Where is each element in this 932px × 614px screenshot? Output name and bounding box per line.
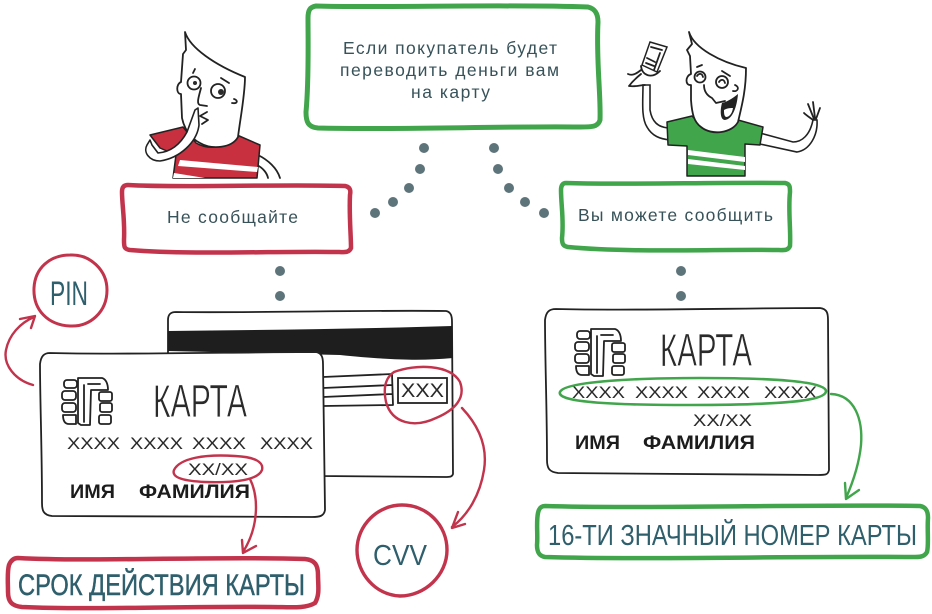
box: may share	[561, 183, 790, 250]
arrow: card to PIN	[6, 316, 35, 385]
card number: XXXX	[764, 383, 817, 402]
top box text: на карту	[411, 82, 490, 102]
top box: condition	[306, 6, 600, 129]
card front: ФАМИЛИЯ	[139, 482, 250, 503]
card front	[40, 352, 325, 517]
character: thinking man in red shirt	[146, 32, 280, 178]
top box text	[340, 38, 559, 102]
label box: expiry date: СРОК ДЕЙСТВИЯ КАРТЫ	[18, 568, 305, 602]
card number: XXXX	[635, 383, 688, 402]
card front: XX/XX	[188, 460, 248, 479]
card number: XXXX	[572, 383, 625, 402]
dotted connector: to left cards	[275, 266, 285, 301]
card right: ФАМИЛИЯ	[643, 433, 755, 454]
card number: XXXX	[67, 434, 120, 453]
expiry highlight ellipse	[174, 456, 262, 482]
character: happy man in green shirt holding a card	[628, 32, 820, 176]
card right: ИМЯ	[575, 433, 620, 454]
card number	[572, 383, 817, 402]
arrow: number to label	[831, 394, 861, 499]
top box text: переводить деньги вам	[340, 60, 559, 80]
card number: XXXX	[260, 434, 313, 453]
card right	[545, 308, 829, 475]
card number: XXXX	[192, 434, 246, 453]
card number highlight ellipse	[560, 378, 826, 405]
box: may share: Вы можете сообщить	[578, 205, 773, 225]
card number: XXXX	[697, 383, 750, 402]
circle: CVV	[357, 505, 447, 596]
arrow: CVV value to circle	[452, 408, 485, 528]
card number: XXXX	[130, 434, 183, 453]
dotted connector: left	[370, 143, 429, 218]
dotted connector: to right card	[676, 266, 686, 301]
arrow: expiry to label	[242, 479, 256, 553]
icon: card chip	[575, 329, 625, 376]
circle: PIN: PIN	[50, 275, 88, 313]
top box text: Если покупатель будет	[343, 38, 557, 58]
card back	[168, 311, 453, 477]
box: do not share: Не сообщайте	[167, 207, 298, 227]
circle: PIN	[34, 255, 107, 326]
box: do not share	[122, 185, 351, 253]
circle: CVV: CVV	[373, 540, 428, 572]
label box: expiry date	[8, 558, 318, 608]
card right: КАРТА	[660, 324, 752, 376]
card number	[67, 434, 313, 453]
card front: КАРТА	[153, 375, 247, 427]
card right: XX/XX	[693, 411, 752, 430]
dotted connector: right	[489, 143, 549, 218]
CVV highlight ellipse	[385, 367, 462, 423]
label box: 16-digit number	[537, 506, 928, 558]
card back: XXX	[401, 381, 444, 402]
card front: ИМЯ	[70, 482, 115, 503]
icon: card chip	[62, 378, 112, 425]
